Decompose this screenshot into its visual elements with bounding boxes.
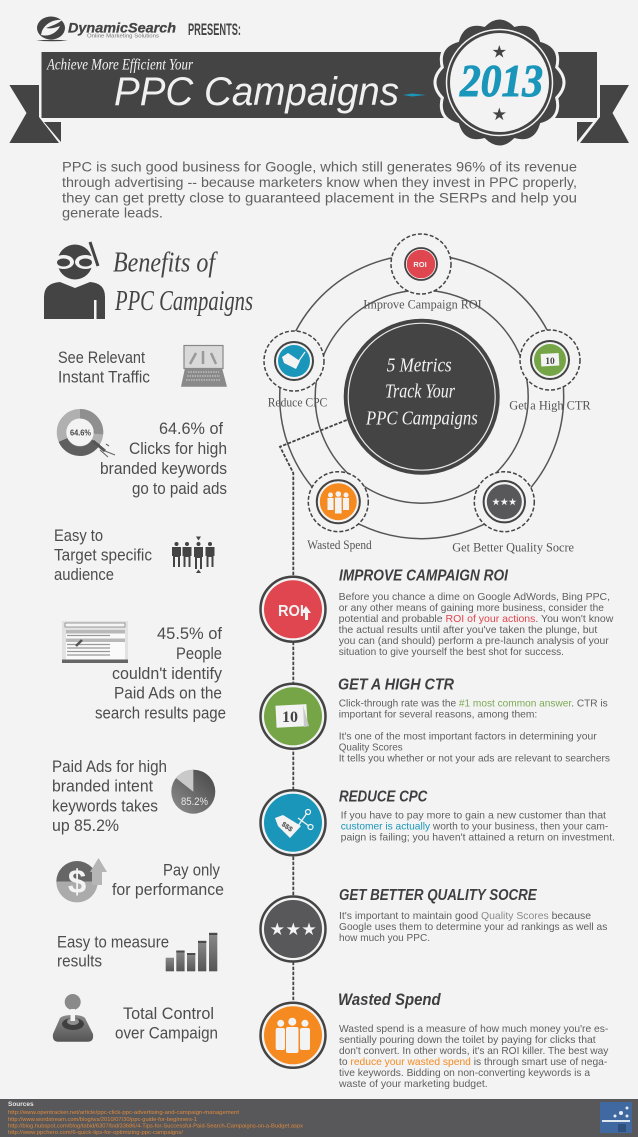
section: wasted spend: waste of your marketing budget. — [338, 1079, 488, 1090]
section: reduce CPC: customer is actually worth to your business, then your cam- — [341, 821, 608, 832]
central circle: 5 Metrics — [387, 355, 452, 377]
section: reduce CPC: paign is failing; you haven't attained a return on investment. — [341, 832, 615, 843]
section: get a high CTR — [338, 676, 610, 764]
footer: sources: http://www.opentracker.net/article/ppc-click-ppc-advertising-and-campaign-management — [8, 1110, 239, 1116]
node labels: Get Better Quality Socre — [452, 541, 574, 555]
section: get a high CTR: Quality Scores — [339, 742, 403, 753]
benefit: relevant instant traffic: Instant Traffic — [58, 369, 150, 387]
benefit: target specific audience: Easy to — [54, 527, 103, 545]
footer: sources: Sources — [8, 1101, 34, 1108]
benefit: pay only for performance: $ — [68, 863, 86, 900]
section: get a high CTR: Click-through rate was the #1 most common answer. CTR is — [339, 699, 608, 710]
benefit: total control, joystick — [53, 994, 218, 1043]
badge: 2013 — [436, 19, 563, 146]
benefit: 64.6% clicks donut: 64.6% of — [159, 420, 223, 438]
title banner ribbon: PPC Campaigns — [114, 70, 399, 114]
node labels — [268, 297, 591, 555]
benefit: 85.2% paid ads pie: up 85.2% — [52, 817, 119, 835]
intro paragraph: through advertising -- because marketers know when they invest in PPC properly, — [62, 175, 577, 190]
benefit: 64.6% clicks donut — [62, 414, 227, 498]
footer logo — [600, 1102, 632, 1133]
benefit: 45.5% could not identify paid ads — [62, 621, 226, 723]
section: improve campaign ROI — [339, 568, 614, 658]
presents label: PRESENTS: — [188, 20, 241, 39]
section: improve campaign ROI: Before you chance a dime on Google AdWords, Bing PPC, — [339, 592, 610, 603]
benefit: 64.6% clicks donut: Clicks for high — [129, 440, 227, 458]
node labels: Wasted Spend — [307, 538, 372, 552]
benefit: easy to measure results, bars: results — [57, 953, 102, 971]
section: reduce CPC: REDUCE CPC — [339, 789, 428, 806]
node: get a high CTR: 10 — [545, 357, 555, 367]
benefit: pay only for performance: Pay only — [163, 862, 221, 880]
icon: person with glasses — [44, 242, 105, 319]
section: quality score — [339, 887, 607, 944]
benefit: 64.6% clicks donut: 64.6% — [70, 428, 91, 438]
timeline icon: ROI — [260, 577, 326, 642]
benefit: target specific audience: Target specific — [54, 547, 152, 565]
logo: Dynamic Search: Online Marketing Solutions — [87, 34, 160, 40]
logo: Dynamic Search: DynamicSearch — [68, 20, 176, 36]
benefit: 85.2% paid ads pie: Paid Ads for high — [52, 758, 167, 776]
timeline icon: people — [260, 1003, 326, 1068]
benefit: 64.6% clicks donut: branded keywords — [100, 460, 227, 478]
heading: Benefits of PPC Campaigns: Benefits of — [113, 246, 218, 278]
node: reduce CPC — [264, 331, 324, 391]
badge: 2013: 2013 — [459, 56, 543, 106]
footer: sources — [0, 1099, 638, 1137]
section: quality score: Google uses them to determine your ad rankings as well as — [339, 922, 607, 933]
benefit: pay only for performance: for performance — [112, 881, 224, 899]
benefit: 45.5% could not identify paid ads: People — [176, 645, 222, 663]
section: improve campaign ROI: you can (and should) perform a pre-launch analysis of your — [339, 636, 609, 647]
benefit: 85.2% paid ads pie: keywords takes — [52, 798, 158, 816]
title banner ribbon: Achieve More Efficient Your — [46, 56, 194, 74]
intro paragraph: PPC is such good business for Google, which still generates 96% of its revenue — [62, 160, 577, 174]
benefit: 64.6% clicks donut: go to paid ads — [132, 480, 227, 498]
section: get a high CTR: important for several reasons, among them: — [339, 710, 537, 721]
timeline icon: calendar 10 — [260, 684, 326, 749]
central circle: Track Your — [385, 381, 455, 403]
section: improve campaign ROI: situation to give yourself the best shot for success. — [339, 647, 564, 658]
section: quality score: how much you PPC. — [339, 933, 430, 944]
section: quality score: It's important to maintain good Quality Scores because — [339, 911, 591, 922]
section: reduce CPC — [339, 789, 615, 843]
benefit: 45.5% could not identify paid ads: Paid Ads on the — [114, 685, 222, 703]
section: improve campaign ROI: IMPROVE CAMPAIGN ROI — [339, 568, 509, 585]
node: get a high CTR — [520, 330, 580, 390]
intro paragraph: generate leads. — [62, 206, 163, 220]
benefit: total control, joystick: Total Control — [123, 1005, 214, 1023]
footer: sources: http://www.wordstream.com/blog/ws/2010/07/30/ppc-guide-for-beginners-1 — [8, 1117, 197, 1123]
node: improve campaign ROI: ROI — [413, 260, 427, 269]
central circle — [344, 319, 500, 475]
benefit: target specific audience — [54, 527, 214, 584]
benefit: pay only for performance — [56, 858, 224, 902]
intro paragraph — [62, 160, 577, 220]
node: wasted spend — [308, 472, 368, 532]
section: wasted spend: tive keywords. Bidding on non-converting keywords is a — [339, 1068, 590, 1079]
chart: 5 metrics ring diagram — [264, 234, 591, 1005]
benefit: relevant instant traffic: See Relevant — [58, 349, 145, 367]
benefit: relevant instant traffic — [58, 346, 227, 387]
node: quality score — [474, 472, 534, 532]
benefit: easy to measure results, bars — [57, 933, 217, 971]
section: wasted spend: Wasted spend is a measure of how much money you're es- — [339, 1024, 608, 1035]
benefit: 85.2% paid ads pie: branded intent — [52, 778, 153, 796]
logo: Dynamic Search — [36, 16, 176, 41]
section: wasted spend: to reduce your wasted spend is through smart use of nega- — [339, 1057, 607, 1068]
heading: Benefits of PPC Campaigns — [113, 246, 253, 317]
timeline icon: ROI: ROI — [278, 603, 304, 620]
benefit: 45.5% could not identify paid ads: couldn't identify — [112, 665, 223, 683]
timeline icon: price tag — [260, 790, 326, 855]
title banner ribbon — [9, 52, 629, 143]
section: get a high CTR: It tells you whether or not your ads are relevant to searchers — [339, 753, 610, 764]
section: improve campaign ROI: the actual results until after you've taken the plunge, but — [339, 625, 597, 636]
section: reduce CPC: If you have to pay more to gain a new customer than that — [341, 810, 606, 821]
node labels: Get a High CTR — [509, 398, 591, 412]
dashed connector to timeline — [280, 420, 347, 1005]
timeline icon: calendar 10: 10 — [282, 709, 298, 726]
benefit: 45.5% could not identify paid ads: 45.5% of — [157, 625, 222, 643]
heading: Benefits of PPC Campaigns: PPC Campaigns — [114, 285, 253, 317]
intro paragraph: they can get pretty close to guaranteed placement in the SERPs and help you — [62, 190, 577, 205]
footer: sources: http://www.ppchero.com/6-quick-tips-for-optimizing-ppc-campaigns/ — [8, 1130, 183, 1136]
section: wasted spend: sentially pouring down the toilet by paying for clicks that — [339, 1035, 596, 1046]
node labels: Improve Campaign ROI — [363, 297, 482, 311]
section: improve campaign ROI: potential and probable ROI of your actions. You won't know — [339, 614, 614, 625]
benefit: easy to measure results, bars: Easy to measure — [57, 934, 169, 952]
timeline icon: price tag: $$$ — [280, 821, 294, 834]
section: improve campaign ROI: or any other means of gaining more business, consider the — [339, 603, 604, 614]
section: wasted spend: don't convert. In other words, it's an ROI killer. The best way — [339, 1046, 609, 1057]
section: get a high CTR: GET A HIGH CTR — [338, 676, 455, 693]
node labels: Reduce CPC — [268, 396, 327, 410]
section: wasted spend: Wasted Spend — [338, 990, 441, 1009]
section: wasted spend — [338, 990, 609, 1090]
benefit: 85.2% paid ads pie: 85.2% — [181, 796, 208, 808]
section: quality score: GET BETTER QUALITY SOCRE — [339, 887, 537, 904]
benefit: 45.5% could not identify paid ads: search results page — [95, 705, 226, 723]
benefit: target specific audience: audience — [54, 566, 114, 584]
benefit: 85.2% paid ads pie — [52, 758, 215, 835]
timeline icon: three stars — [260, 896, 326, 962]
central circle: PPC Campaigns — [365, 407, 478, 429]
section: get a high CTR: It's one of the most important factors in determining your — [339, 731, 597, 742]
footer: sources: http://blog.hubspot.com/blog/tabid/6307/bid/33686/4-Tips-for-Successful-Paid-Search-Campaigns-on-a-Budget.aspx — [8, 1124, 303, 1130]
node: improve campaign ROI — [391, 234, 451, 294]
benefit: total control, joystick: over Campaign — [115, 1025, 218, 1043]
